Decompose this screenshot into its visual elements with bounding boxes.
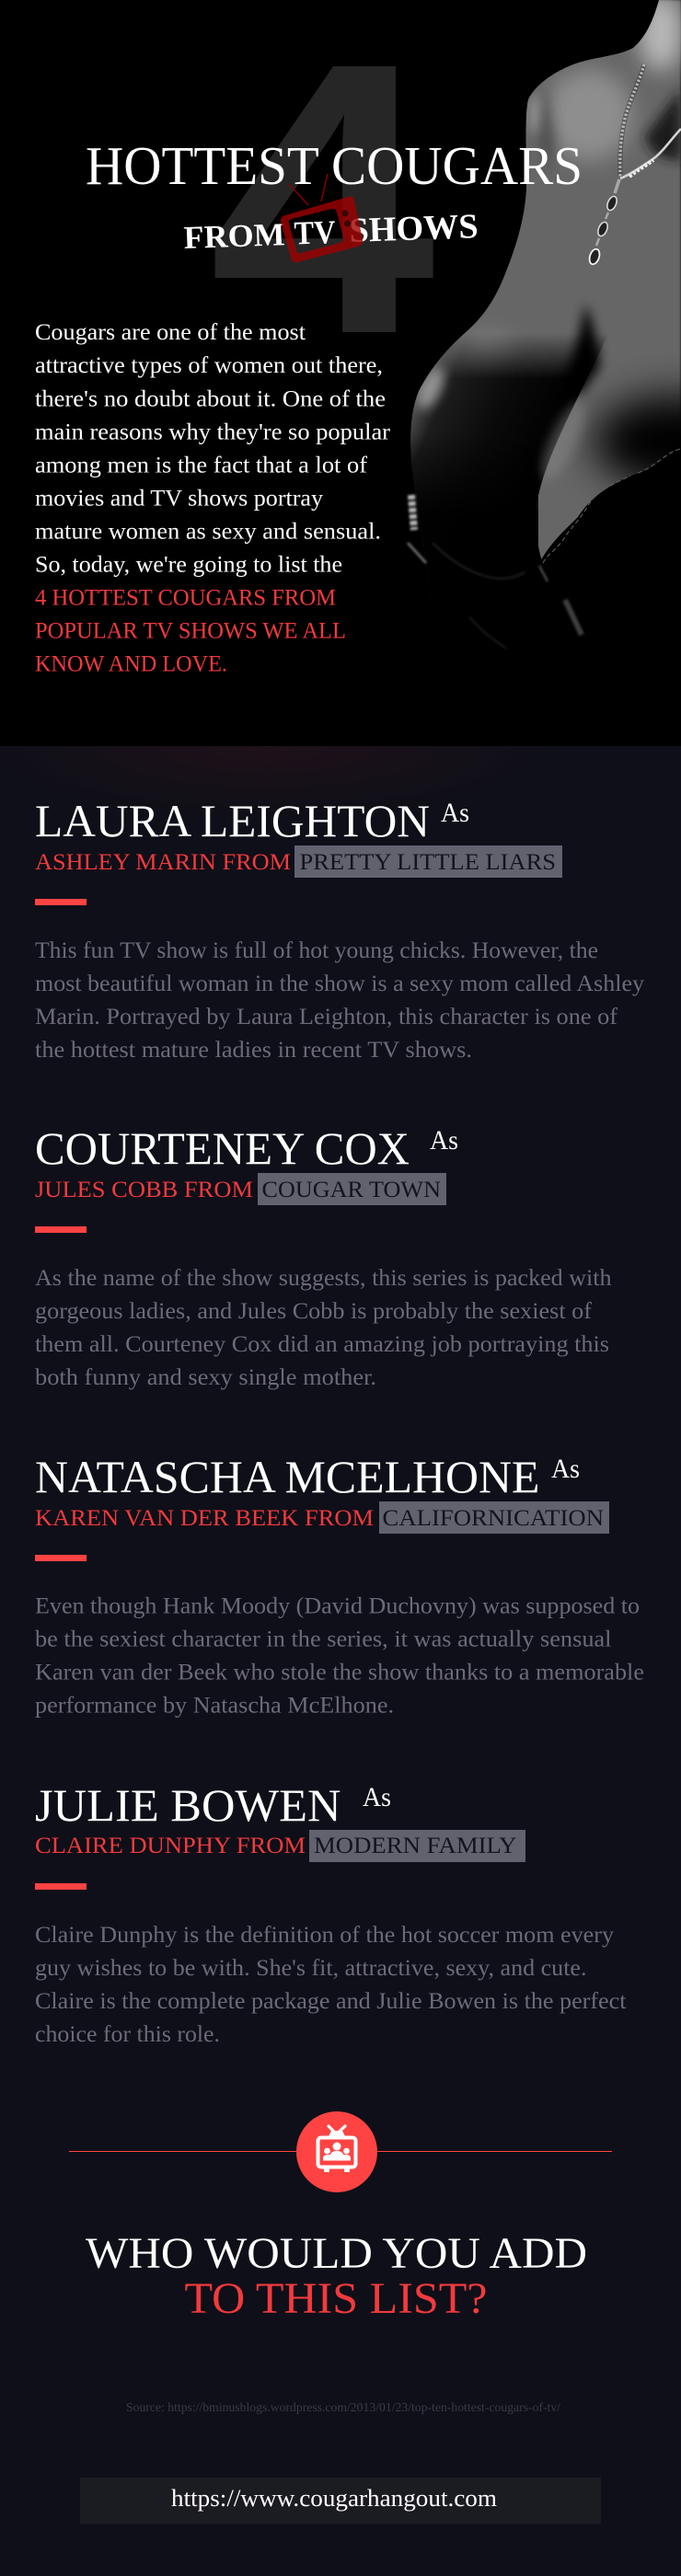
description: the hottest mature ladies in recent TV shows. xyxy=(35,1038,472,1063)
panel: julie bowen xyxy=(35,1779,627,2047)
image: photo of woman with necklace xyxy=(396,0,681,649)
as label: As xyxy=(363,1782,391,1812)
accent bar xyxy=(35,1555,87,1561)
hero background xyxy=(0,0,681,746)
lace left xyxy=(408,495,582,649)
accent bar xyxy=(35,1226,87,1233)
show tag xyxy=(294,845,562,878)
panel: laura leighton xyxy=(35,795,645,1063)
description: performance by Natascha McElhone. xyxy=(35,1693,394,1719)
name: JULIE BOWEN xyxy=(35,1779,340,1831)
name: LAURA LEIGHTON xyxy=(35,795,430,846)
subtitle: from tv shows: FROM xyxy=(183,216,285,256)
description: Karen van der Beek who stole the show thanks to a memorable xyxy=(35,1660,644,1685)
show tag xyxy=(309,1830,525,1862)
accent bar xyxy=(35,1883,87,1890)
name: COURTENEY COX xyxy=(35,1122,410,1174)
description: them all. Courteney Cox did an amazing job portraying this xyxy=(35,1332,609,1357)
character: JULES COBB FROM xyxy=(35,1178,253,1202)
description: guy wishes to be with. She's fit, attractive, sexy, and cute. xyxy=(35,1956,587,1981)
as label: As xyxy=(430,1125,458,1156)
intro paragraph: mature women as sexy and sensual. xyxy=(35,519,381,545)
closing question: WHO WOULD YOU ADD xyxy=(86,2229,587,2278)
description: Claire is the complete package and Julie Bowen is the perfect xyxy=(35,1989,627,2014)
description: This fun TV show is full of hot young chicks. However, the xyxy=(35,938,598,963)
intro paragraph: 4 HOTTEST COUGARS FROM xyxy=(35,585,336,611)
icon: tv with audience xyxy=(296,2111,377,2192)
show tag: MODERN FAMILY xyxy=(314,1834,517,1858)
necklace xyxy=(588,64,681,266)
intro paragraph: attractive types of women out there, xyxy=(35,353,383,378)
description xyxy=(35,1923,627,2047)
description xyxy=(35,938,645,1063)
show tag: COUGAR TOWN xyxy=(261,1178,441,1202)
panel: hero xyxy=(0,0,681,746)
as label: As xyxy=(441,798,469,828)
intro paragraph: there's no doubt about it. One of the xyxy=(35,386,386,412)
show tag xyxy=(379,1501,609,1534)
source line: Source: https://bminusblogs.wordpress.com/2013/01/23/top-ten-hottest-cougars-of-tv/ xyxy=(126,2400,560,2414)
name: NATASCHA MCELHONE xyxy=(35,1451,539,1502)
title: hottest cougars: HOTTEST COUGARS xyxy=(86,135,583,196)
website footer bar xyxy=(80,2478,601,2524)
accent bar xyxy=(35,899,87,905)
description: be the sexiest character in the series, it was actually sensual xyxy=(35,1627,612,1652)
description xyxy=(35,1593,644,1719)
intro paragraph: POPULAR TV SHOWS WE ALL xyxy=(35,618,346,644)
panel: courteney cox xyxy=(35,1122,612,1390)
closing question: TO THIS LIST? xyxy=(184,2274,488,2323)
description: choice for this role. xyxy=(35,2022,220,2047)
subtitle: from tv shows: SHOWS xyxy=(349,207,479,250)
description: As the name of the show suggests, this series is packed with xyxy=(35,1266,612,1291)
intro paragraph xyxy=(35,320,391,677)
description: both funny and sexy single mother. xyxy=(35,1365,376,1390)
character: ASHLEY MARIN FROM xyxy=(35,850,291,875)
divider with tv badge xyxy=(69,2111,612,2192)
icon: red tv outline xyxy=(281,174,363,262)
intro paragraph: So, today, we're going to list the xyxy=(35,552,342,578)
closing question xyxy=(86,2229,587,2323)
lace edge xyxy=(543,449,681,563)
show tag xyxy=(258,1173,446,1205)
intro paragraph: KNOW AND LOVE. xyxy=(35,651,227,677)
panel: natascha mcelhone xyxy=(35,1451,644,1719)
description: Marin. Portrayed by Laura Leighton, this character is one of xyxy=(35,1005,618,1029)
description xyxy=(35,1266,612,1390)
description: most beautiful woman in the show is a sexy mom called Ashley xyxy=(35,972,645,996)
description: Even though Hank Moody (David Duchovny) was supposed to xyxy=(35,1593,640,1619)
show tag: CALIFORNICATION xyxy=(383,1506,604,1531)
intro paragraph: main reasons why they're so popular xyxy=(35,420,391,445)
website footer bar: https://www.cougarhangout.com xyxy=(171,2485,497,2512)
top glow of list section xyxy=(0,746,681,829)
description: gorgeous ladies, and Jules Cobb is probably the sexiest of xyxy=(35,1299,593,1324)
intro paragraph: Cougars are one of the most xyxy=(35,320,306,345)
subtitle: from tv shows: TV xyxy=(294,213,336,251)
show tag: PRETTY LITTLE LIARS xyxy=(300,850,556,875)
description: Claire Dunphy is the definition of the hot soccer mom every xyxy=(35,1923,615,1948)
as label: As xyxy=(551,1454,580,1484)
subtitle: from tv shows xyxy=(183,207,479,256)
character: KAREN VAN DER BEEK FROM xyxy=(35,1506,374,1531)
intro paragraph: among men is the fact that a lot of xyxy=(35,453,368,478)
lower dark area below lace edge xyxy=(541,458,681,607)
character: CLAIRE DUNPHY FROM xyxy=(35,1834,306,1858)
left breast shadow xyxy=(410,337,606,563)
intro paragraph: movies and TV shows portray xyxy=(35,486,324,512)
